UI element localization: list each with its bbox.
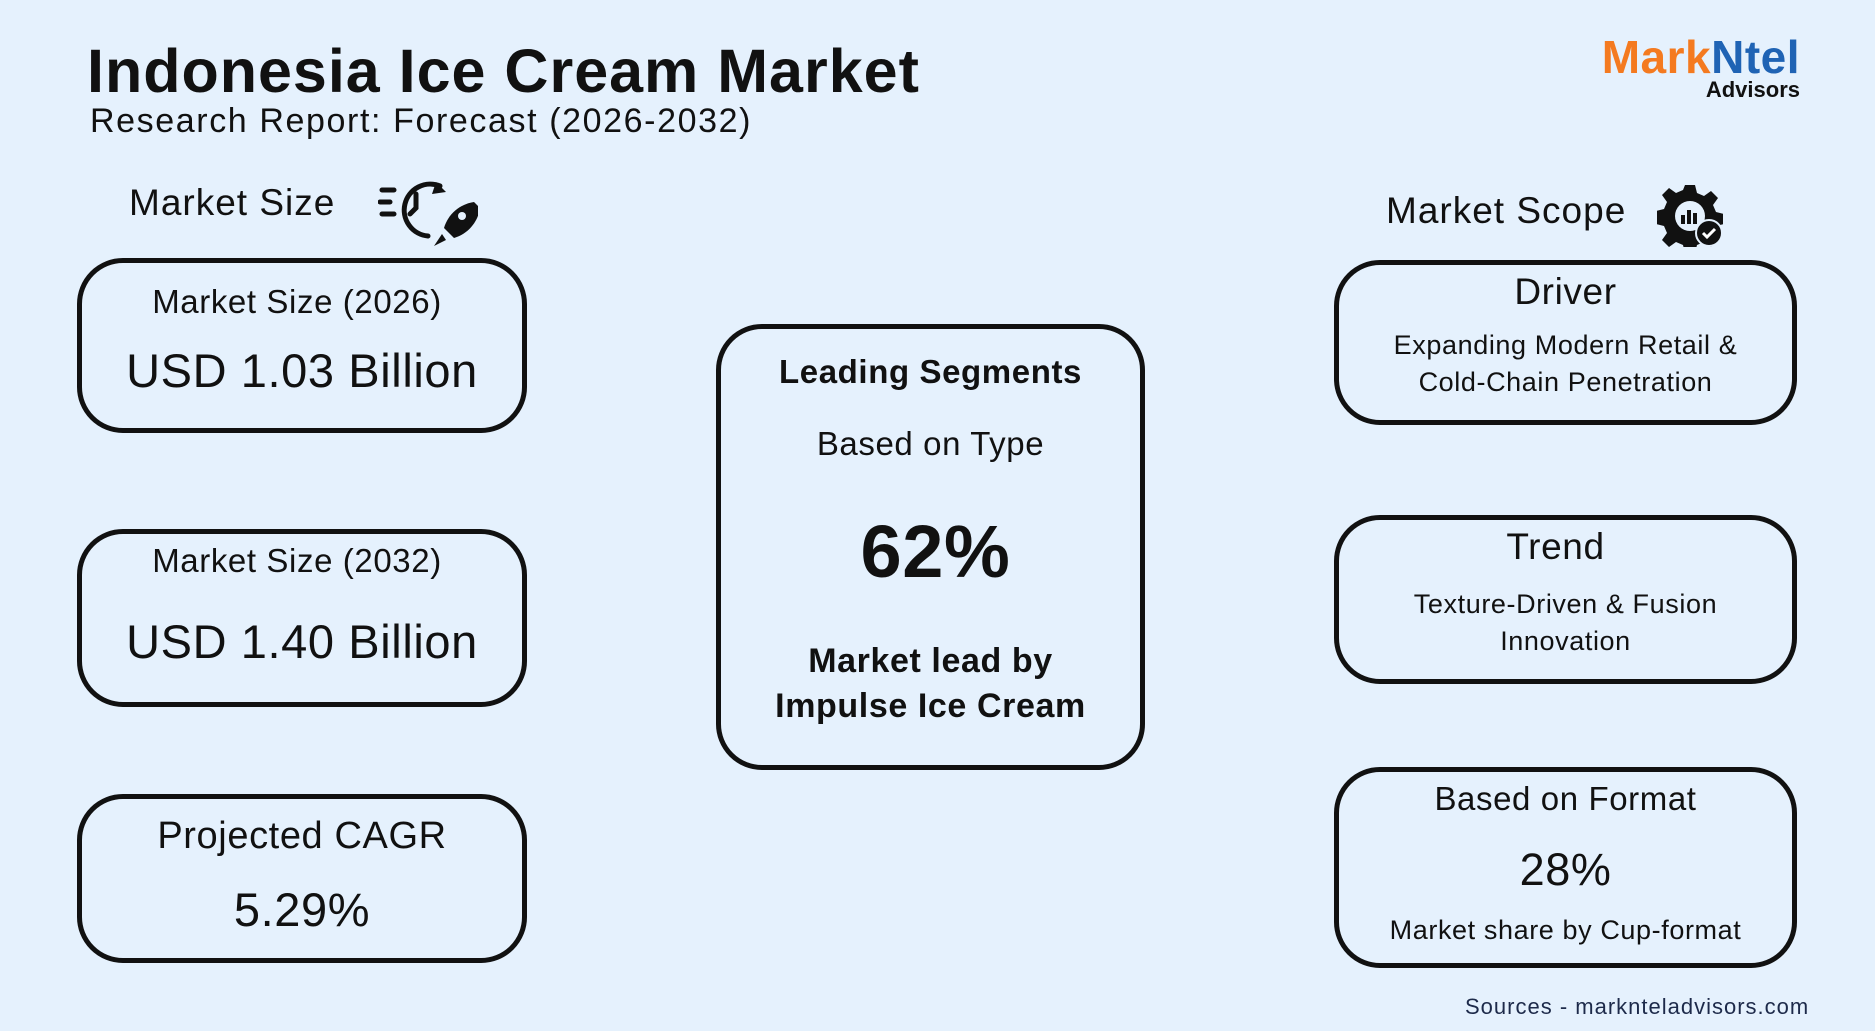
heading: market size: Market Size [129,182,335,223]
panel: trend: Trend [1506,526,1605,567]
panel: market size 2026: USD 1.03 Billion [126,344,478,397]
panel: format: Based on Format [1434,780,1697,817]
panel: format: 28% [1520,844,1611,895]
panel: leading segments [716,324,1145,770]
panel: leading segments: Based on Type [817,425,1044,462]
panel: leading segments: Leading Segments [779,353,1082,390]
panel: market size 2032: USD 1.40 Billion [126,615,478,668]
title: Indonesia Ice Cream Market [87,37,920,105]
panel: market size 2026 [77,258,527,433]
subtitle: Research Report: Forecast (2026-2032) [90,102,752,140]
panel: market size 2032: Market Size (2032) [152,542,442,579]
panel: market size 2032 [77,529,527,707]
sources: Sources - marknteladvisors.com [1465,994,1809,1019]
panel: format [1334,767,1797,968]
panel: driver: Cold-Chain Penetration [1419,367,1712,397]
panel: leading segments: 62% [861,510,1010,593]
panel: CAGR [77,794,527,963]
icon: gear check [1657,185,1723,247]
logo: MarkNtel [1602,31,1800,83]
panel: trend [1334,515,1797,684]
panel: leading segments: Impulse Ice Cream [775,687,1086,725]
panel: leading segments: Market lead by [808,642,1053,680]
panel: CAGR: 5.29% [234,883,370,936]
panel: driver [1334,260,1797,425]
logo: Advisors [1706,77,1800,102]
panel: driver: Driver [1514,271,1617,312]
heading: market scope: Market Scope [1386,190,1626,231]
panel: driver: Expanding Modern Retail & [1394,330,1737,360]
panel: format: Market share by Cup-format [1390,915,1741,945]
panel: market size 2026: Market Size (2026) [152,283,442,320]
icon: clock rocket [378,182,478,246]
panel: trend: Innovation [1500,626,1631,656]
panel: CAGR: Projected CAGR [157,815,447,857]
panel: trend: Texture-Driven & Fusion [1414,589,1717,619]
